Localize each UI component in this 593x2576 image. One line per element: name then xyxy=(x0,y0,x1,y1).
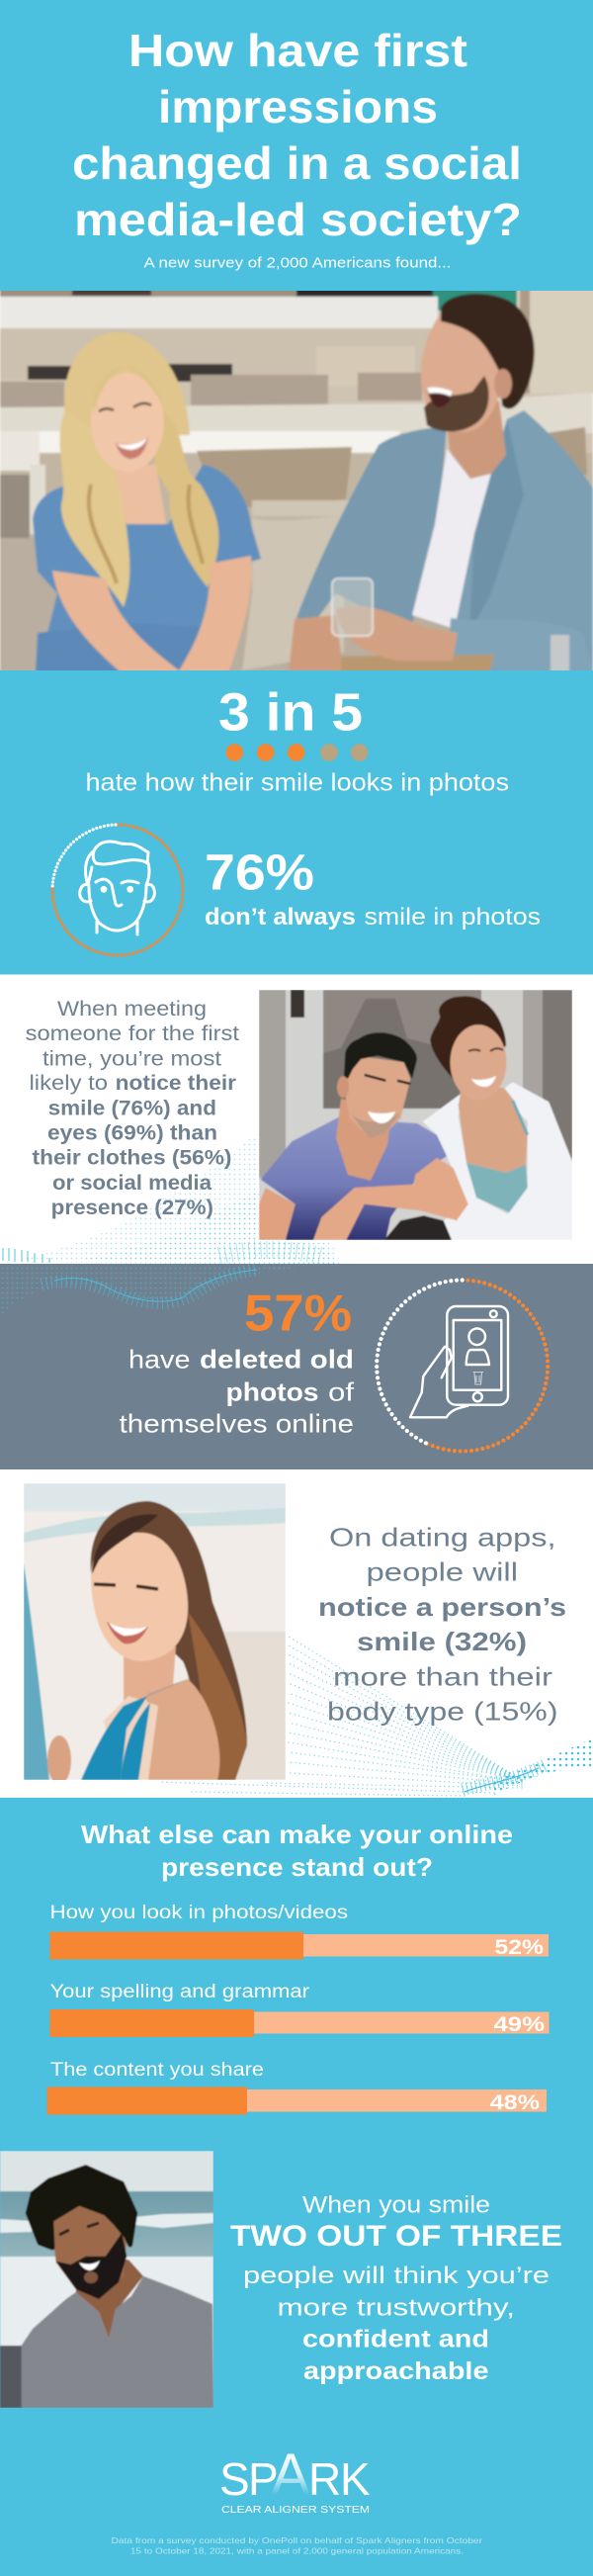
text: on dating apps xyxy=(318,1523,566,1727)
bar: how you look 52%: How you look in photos/videos xyxy=(49,1903,348,1923)
text: on dating apps: more than their xyxy=(333,1662,552,1692)
title: media-led society? xyxy=(74,194,522,245)
icon: hand holding phone in 57 percent dotted ring xyxy=(377,1280,548,1452)
logo: Spark clear aligner system: S xyxy=(219,2453,250,2505)
text: when meeting someone: someone for the first xyxy=(26,1022,239,1045)
caption: have deleted old photos: themselves online xyxy=(119,1409,354,1439)
dotted fan pattern on white section xyxy=(158,1637,522,1796)
photo: smiling man with curly hair on the beach xyxy=(0,2151,213,2408)
photo: man and woman sitting by a door xyxy=(259,990,572,1240)
bar chart xyxy=(47,1903,550,2114)
caption: don't always smile in photos: smile in photos xyxy=(364,904,541,931)
footnote xyxy=(111,2535,482,2555)
subtitle: A new survey of 2,000 Americans found... xyxy=(144,255,451,271)
title: changed in a social xyxy=(72,137,522,189)
panel: 3 in 5 and 76% stats xyxy=(0,670,593,975)
text: when you smile two out of three: confident and xyxy=(302,2326,489,2354)
text: when meeting someone: eyes (69%) than xyxy=(47,1121,217,1144)
heading xyxy=(81,1820,513,1882)
caption: don't always smile in photos xyxy=(205,904,541,931)
panel: gray deleted photos stat xyxy=(0,1264,593,1469)
bar: content you share 48%: 48% xyxy=(490,2091,540,2114)
photo: smiling woman on the beach with surfboard xyxy=(24,1483,286,1785)
text: when meeting someone: smile (76%) and xyxy=(48,1098,216,1119)
text: when you smile two out of three: TWO OUT OF THREE xyxy=(230,2220,562,2253)
text: when meeting someone: notice their xyxy=(116,1072,236,1095)
text: when meeting someone: When meeting xyxy=(57,998,207,1021)
caption: have deleted old photos xyxy=(119,1345,355,1439)
title xyxy=(72,25,522,245)
logo: Spark clear aligner system: A xyxy=(271,2442,310,2508)
text: on dating apps: people will xyxy=(366,1557,518,1587)
bar: content you share 48%: The content you share xyxy=(50,2060,264,2081)
caption: have deleted old photos: have xyxy=(128,1345,190,1375)
caption: have deleted old photos: of xyxy=(328,1377,355,1406)
text: when you smile two out of three: people will think you’re xyxy=(243,2263,550,2289)
text: when meeting someone: likely to xyxy=(30,1072,108,1095)
stat: 3 in 5: 3 in 5 xyxy=(218,682,363,742)
logo: Spark clear aligner system: CLEAR ALIGNER SYSTEM xyxy=(221,2504,370,2516)
dotted wave pattern on white section xyxy=(0,1132,341,1264)
footnote: 15 to October 18, 2021, with a panel of 2,000 general population Americans. xyxy=(130,2545,464,2555)
dense dotted wedge at lower right xyxy=(494,1738,593,1795)
bar: spelling and grammar 49%: Your spelling and grammar xyxy=(49,1982,310,2002)
heading: What else can make your online xyxy=(81,1820,513,1849)
logo: Spark clear aligner system xyxy=(219,2442,371,2516)
text: when you smile two out of three: approachable xyxy=(303,2357,489,2385)
text: when you smile two out of three: more trustworthy, xyxy=(277,2294,515,2322)
text: on dating apps: body type (15%) xyxy=(327,1697,557,1727)
text: on dating apps: On dating apps, xyxy=(329,1523,555,1553)
icon: face in 76 percent dotted ring xyxy=(52,825,183,955)
bright cyan strand xyxy=(463,1765,546,1792)
bar: how you look 52% xyxy=(49,1903,549,1960)
text: on dating apps: smile (32%) xyxy=(357,1627,527,1656)
logo: Spark clear aligner system: K xyxy=(340,2453,371,2505)
heading: presence stand out? xyxy=(161,1852,433,1882)
title: How have first xyxy=(128,25,467,76)
title: impressions xyxy=(158,81,438,133)
text: when meeting someone xyxy=(26,998,239,1219)
caption: hate how their smile looks: hate how their smile looks in photos xyxy=(85,768,509,796)
panel: header background xyxy=(0,0,593,291)
stat: 57%: 57% xyxy=(244,1286,352,1343)
text: when meeting someone: or social media xyxy=(52,1172,212,1195)
text: on dating apps: notice a person’s xyxy=(318,1592,566,1622)
photo: smiling couple on a patio xyxy=(0,287,593,674)
bar: spelling and grammar 49% xyxy=(49,1982,550,2037)
text: when meeting someone: presence (27%) xyxy=(51,1197,213,1219)
bar: content you share 48% xyxy=(47,2060,547,2114)
dot scale: three of five xyxy=(225,744,368,761)
bright cyan strands on gray panel xyxy=(42,1270,259,1303)
stat: 76%: 76% xyxy=(205,844,314,900)
dotted wave on gray panel xyxy=(0,1264,331,1317)
panel: what else can make your online presence stand out xyxy=(0,1798,593,2576)
logo: Spark clear aligner system: R xyxy=(308,2453,341,2505)
bar: spelling and grammar 49%: 49% xyxy=(494,2013,545,2036)
logo: Spark clear aligner system: P xyxy=(248,2453,279,2505)
text: when meeting someone: their clothes (56%) xyxy=(32,1147,231,1170)
footnote: Data from a survey conducted by OnePoll on behalf of Spark Aligners from October xyxy=(111,2535,482,2545)
text: when you smile two out of three xyxy=(230,2191,562,2385)
bar: how you look 52%: 52% xyxy=(494,1936,544,1959)
caption: have deleted old photos: photos xyxy=(225,1377,318,1406)
panel: white first meeting section xyxy=(0,975,593,1264)
text: when you smile two out of three: When you smile xyxy=(302,2191,490,2219)
caption: have deleted old photos: deleted old xyxy=(200,1345,354,1375)
panel: white dating apps section xyxy=(0,1469,593,1798)
caption: don't always smile in photos: don’t always xyxy=(205,904,356,931)
text: when meeting someone: time, you’re most xyxy=(42,1047,221,1070)
